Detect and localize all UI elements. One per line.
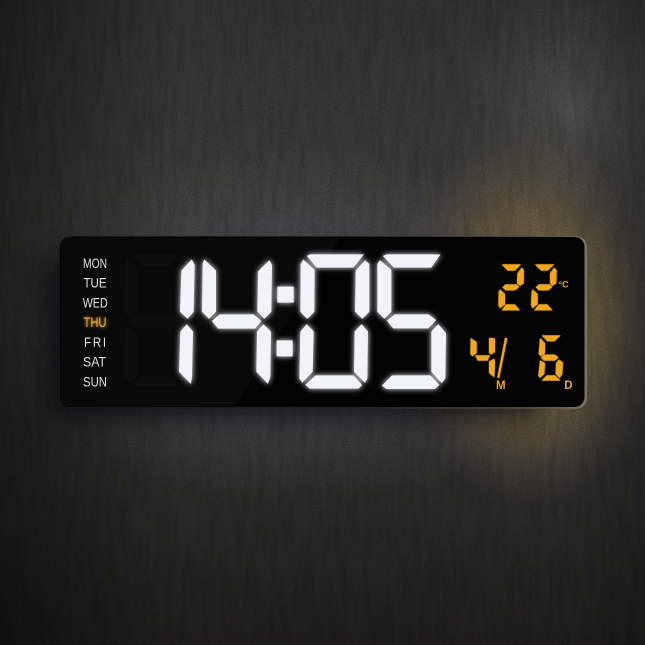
weekday list: FRI [84,335,106,350]
time display: 14:05 [179,255,446,389]
clock shadow on wall [64,256,544,404]
ghost segments: unlit digit [123,255,183,387]
glass reflection [61,238,340,406]
weekday list [83,256,108,390]
digit 4 [202,260,272,383]
digit 0 [300,255,369,388]
date display: 4/6 [470,335,573,392]
colon [277,287,293,356]
clock frame [59,236,587,409]
day label: D [564,380,573,392]
digit 5 [378,255,446,389]
weekday list: TUE [84,276,106,291]
digit 1 [179,260,194,383]
weekday list: MON [83,256,107,271]
temperature display: 22 °C [498,264,569,310]
month label: M [496,380,506,392]
temperature display: 22 °C: °C [558,280,569,290]
weekday list: THU [84,315,106,330]
weekday list: SAT [83,355,106,370]
weekday list: SUN [83,375,107,390]
clock black face [60,237,584,407]
weekday list: WED [83,295,108,310]
